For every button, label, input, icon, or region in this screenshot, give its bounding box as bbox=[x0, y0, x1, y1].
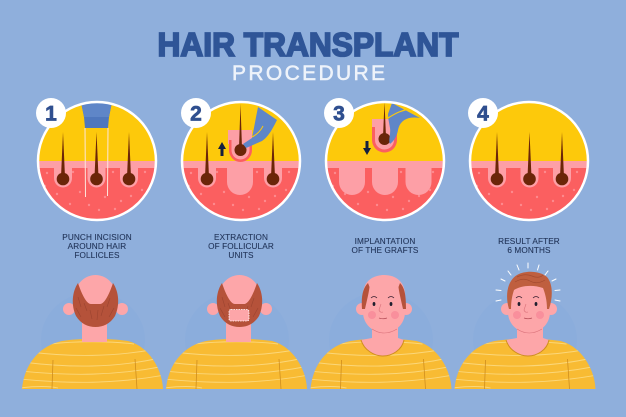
badge: number 2: 2 bbox=[190, 102, 202, 126]
diagram: punch tool over three hair follicles bbox=[37, 100, 157, 223]
badge: number 3 bbox=[324, 98, 354, 128]
caption: step 3: IMPLANTATION bbox=[355, 237, 415, 246]
tweezers bbox=[243, 107, 277, 148]
badge: number 4: 4 bbox=[477, 102, 489, 126]
full hair bbox=[507, 272, 552, 309]
caption: step 4: RESULT AFTER bbox=[498, 237, 560, 246]
caption: step 2: OF FOLLICULAR bbox=[208, 242, 274, 251]
badge: number 1: 1 bbox=[45, 102, 57, 126]
caption: step 2: EXTRACTION bbox=[214, 233, 268, 242]
caption: step 1: AROUND HAIR bbox=[68, 242, 126, 251]
sparkle rays bbox=[496, 263, 560, 301]
figure: front view balding man bbox=[308, 275, 454, 389]
caption: step 2: UNITS bbox=[228, 251, 254, 260]
badge: number 1 bbox=[36, 98, 66, 128]
caption: step 3: OF THE GRAFTS bbox=[352, 246, 419, 255]
panel: step 1 punch incision bbox=[20, 98, 165, 389]
arrow up bbox=[218, 142, 226, 156]
figure: front view man with full hair bbox=[452, 263, 598, 389]
figure: back of head with extraction patch bbox=[164, 275, 309, 389]
graft bbox=[228, 104, 252, 162]
panel: step 3 implantation bbox=[308, 98, 454, 389]
arrow down bbox=[363, 141, 371, 155]
badge: number 4 bbox=[468, 98, 498, 128]
caption: step 1: FOLLICLES bbox=[74, 251, 120, 260]
extraction patch bbox=[229, 310, 249, 321]
badge: number 3: 3 bbox=[333, 102, 345, 126]
title: HAIR TRANSPLANT bbox=[158, 26, 458, 63]
figure: back of head with balding crown bbox=[20, 275, 165, 389]
panel: step 2 extraction bbox=[164, 98, 309, 389]
caption: step 4: 6 MONTHS bbox=[507, 246, 551, 255]
diagram: extraction of follicular unit bbox=[181, 100, 301, 223]
graft bbox=[372, 102, 397, 152]
diagram: implantation of grafts bbox=[325, 100, 445, 223]
subtitle: PROCEDURE bbox=[232, 62, 385, 85]
title bbox=[158, 26, 458, 85]
panel: step 4 result bbox=[452, 98, 598, 389]
tweezers bbox=[388, 103, 420, 144]
caption: step 1: PUNCH INCISION bbox=[62, 233, 132, 242]
side hair bbox=[362, 283, 406, 309]
diagram: result with three healthy hairs bbox=[469, 100, 589, 223]
badge: number 2 bbox=[181, 98, 211, 128]
